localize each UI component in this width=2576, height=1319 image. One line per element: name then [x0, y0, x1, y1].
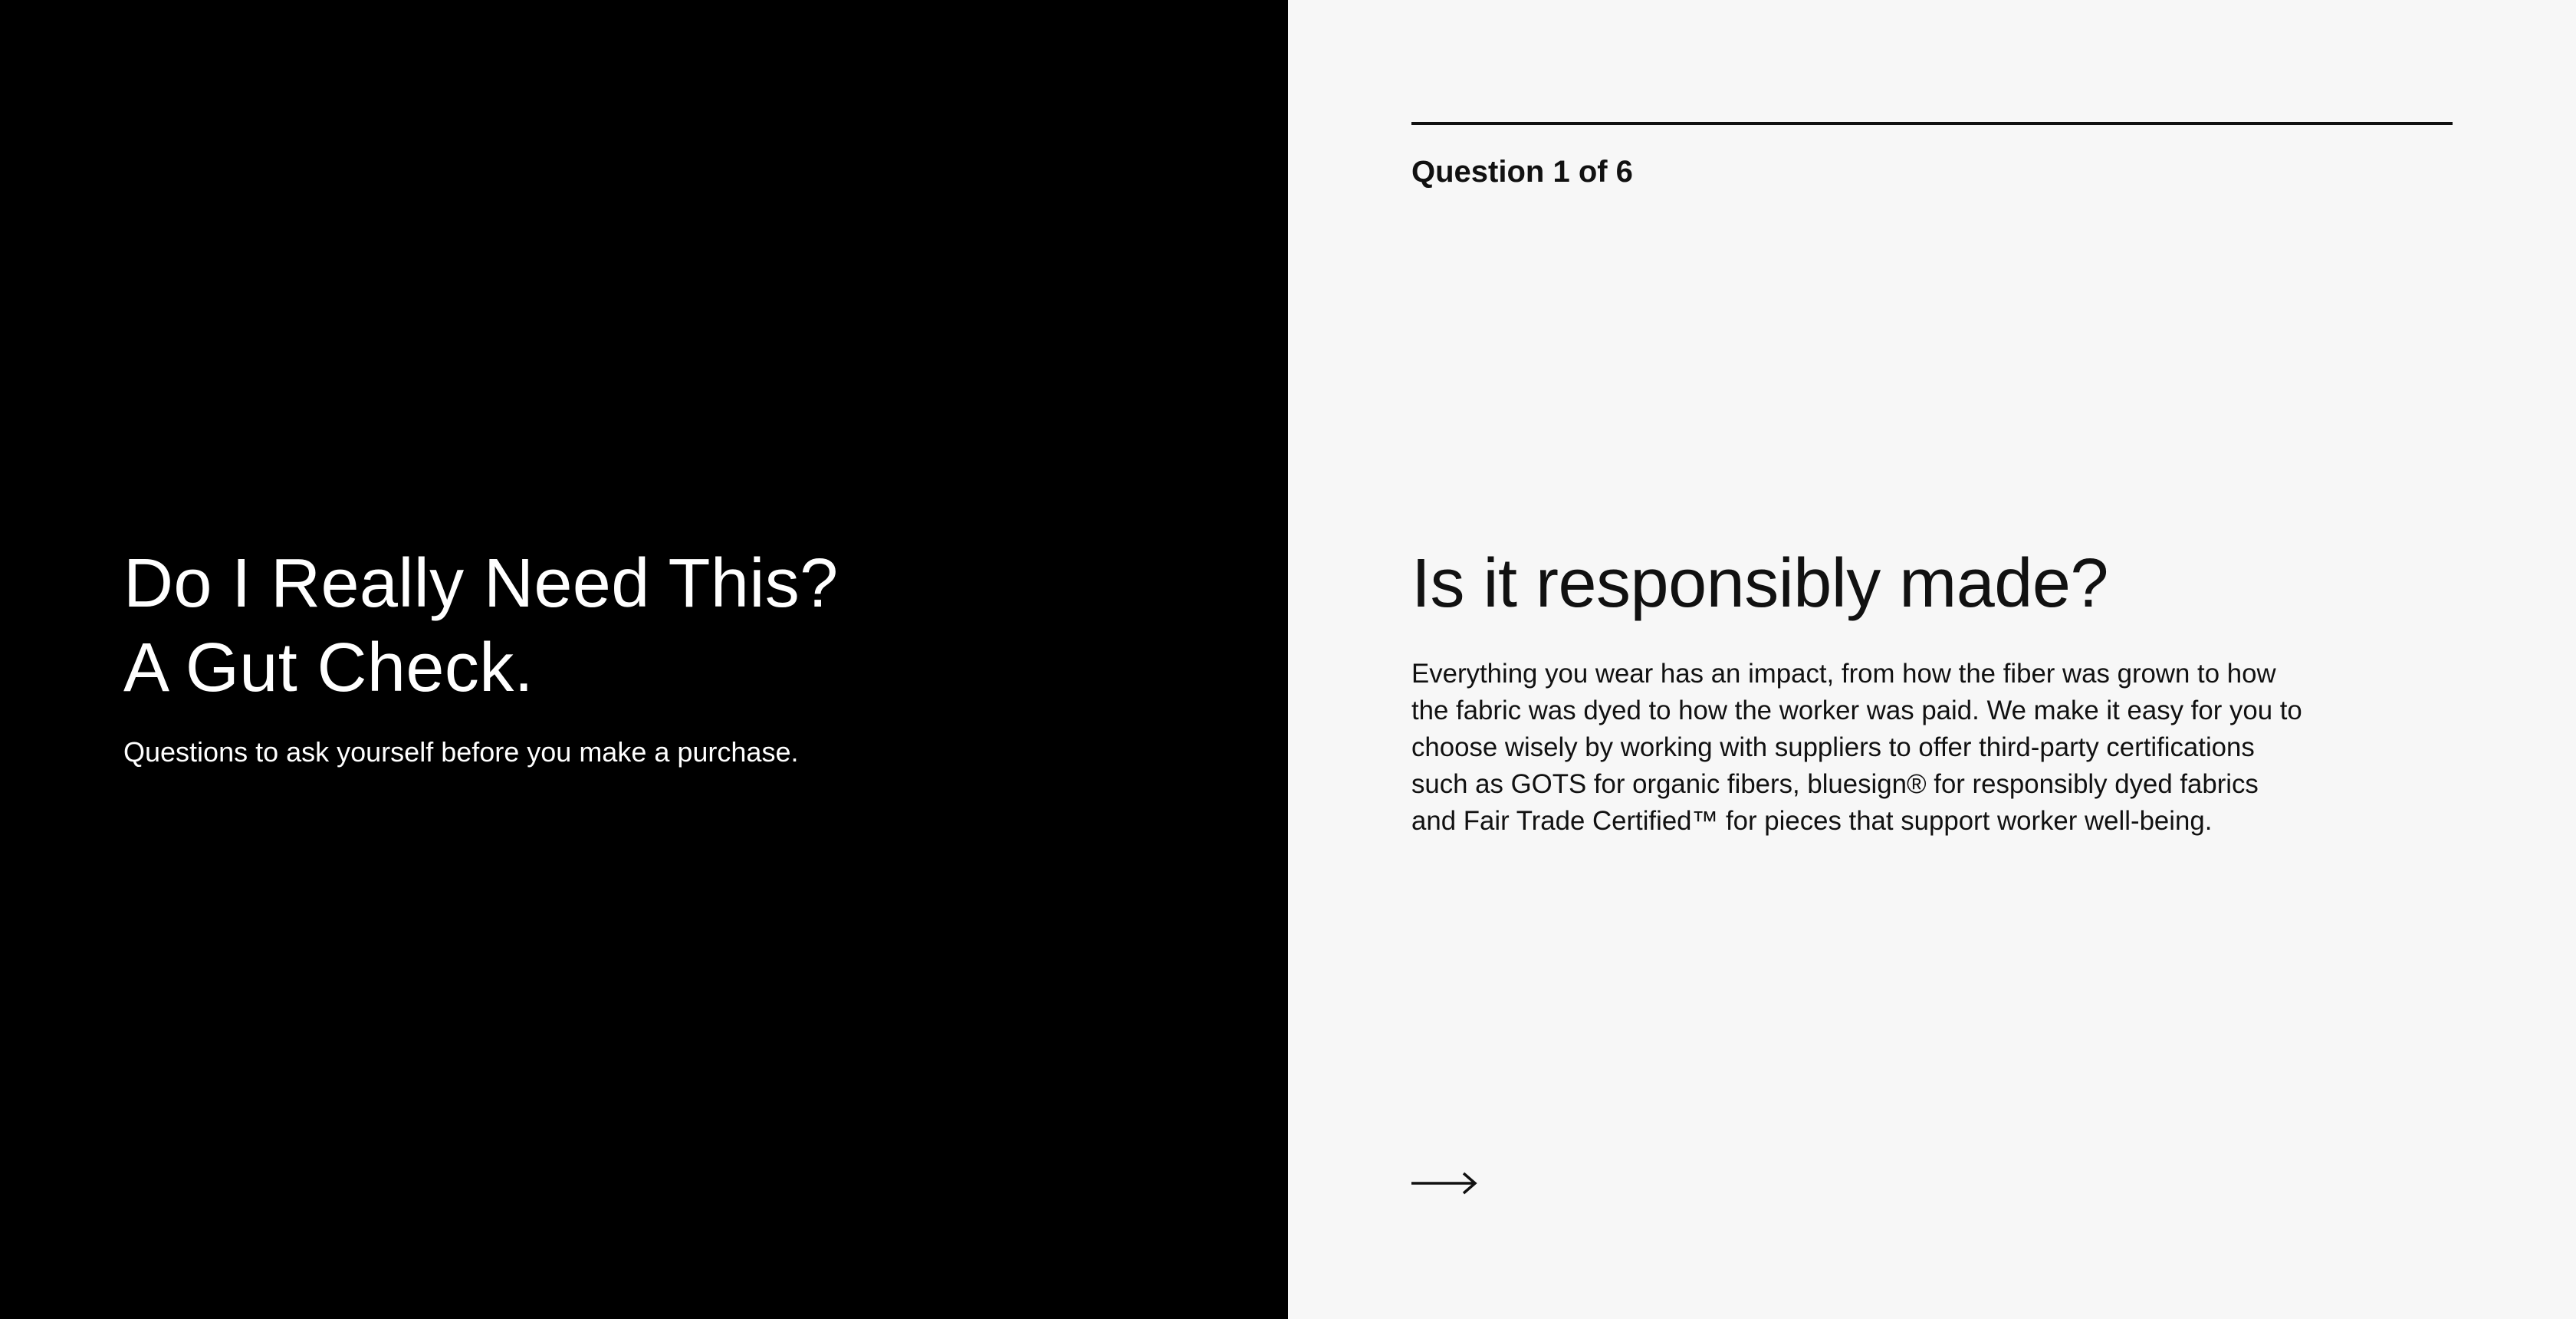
title: A Gut Check. — [123, 630, 534, 706]
body text: and Fair Trade Certified™ for pieces that support worker well-being. — [1411, 806, 2212, 836]
panel: question — [1288, 0, 2576, 1319]
question counter: Question 1 of 6 — [1411, 155, 1633, 189]
panel: left intro — [0, 0, 1288, 1319]
icon: next arrow — [1411, 1172, 1477, 1195]
body text — [1411, 659, 2302, 836]
body text: such as GOTS for organic fibers, bluesign® for responsibly dyed fabrics — [1411, 769, 2259, 799]
title: Do I Really Need This? — [123, 545, 839, 622]
body text: choose wisely by working with suppliers to offer third-party certifications — [1411, 732, 2255, 762]
question heading: Is it responsibly made? — [1411, 545, 2108, 622]
body text: Everything you wear has an impact, from how the fiber was grown to how — [1411, 659, 2276, 689]
subtitle: Questions to ask yourself before you make a purchase. — [123, 736, 798, 768]
body text: the fabric was dyed to how the worker was paid. We make it easy for you to — [1411, 696, 2302, 725]
title — [123, 545, 839, 706]
